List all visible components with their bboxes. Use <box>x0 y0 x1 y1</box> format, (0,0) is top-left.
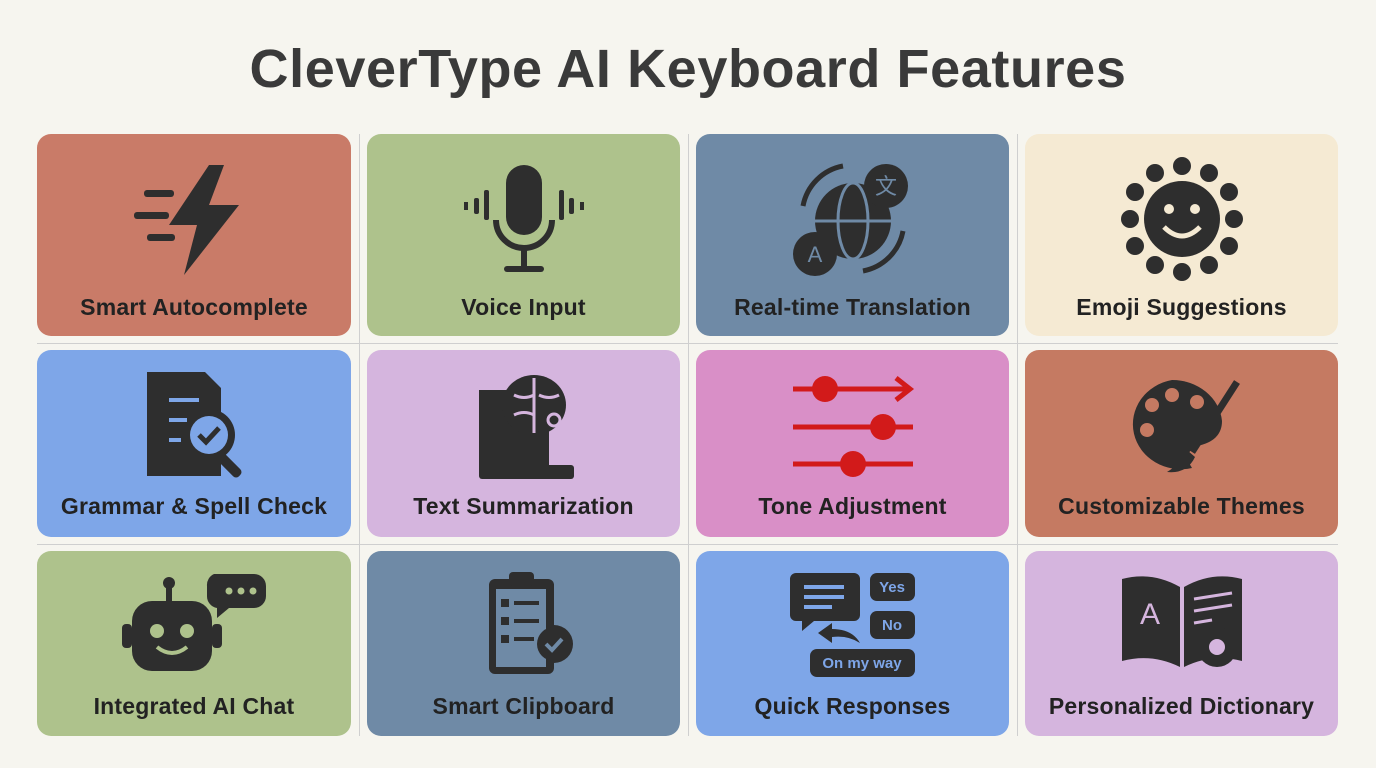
icon: clipboard <box>489 572 573 674</box>
card: Emoji Suggestions: Emoji Suggestions <box>1076 294 1287 320</box>
card: Smart Clipboard <box>367 551 680 736</box>
icon: quick replies: On my way <box>822 655 902 672</box>
card: Text Summarization <box>367 350 680 537</box>
icon: document magnifier <box>147 372 242 478</box>
card: Tone Adjustment <box>696 350 1009 537</box>
card: Real-time Translation: Real-time Translation <box>734 294 971 320</box>
card: Personalized Dictionary <box>1025 551 1338 736</box>
card: Emoji Suggestions <box>1025 134 1338 336</box>
icon: open book gear <box>1122 576 1242 667</box>
card: Smart Clipboard: Smart Clipboard <box>433 693 614 719</box>
icon: quick replies: Yes <box>879 579 904 596</box>
card: Smart Autocomplete: Smart Autocomplete <box>80 294 308 320</box>
icon: book brain <box>479 375 574 479</box>
icon: lightning <box>134 165 239 275</box>
icon: open book gear: A <box>1139 598 1160 631</box>
card: Customizable Themes <box>1025 350 1338 537</box>
card: Quick Responses <box>696 551 1009 736</box>
icon: quick replies <box>790 573 915 677</box>
card: Grammar & Spell Check: Grammar & Spell Check <box>61 493 327 519</box>
icon: globe translation: A <box>807 242 822 267</box>
card: Smart Autocomplete <box>37 134 351 336</box>
card: Real-time Translation <box>696 134 1009 336</box>
card: Customizable Themes: Customizable Themes <box>1058 493 1305 519</box>
card: Quick Responses: Quick Responses <box>754 693 951 719</box>
card: Integrated AI Chat: Integrated AI Chat <box>94 693 294 719</box>
icon: palette <box>1132 380 1240 472</box>
icon: robot chat <box>122 574 266 671</box>
card: Personalized Dictionary: Personalized Dictionary <box>1049 693 1314 719</box>
icon: globe translation: 文 <box>874 169 897 201</box>
card: Voice Input: Voice Input <box>461 294 586 320</box>
card: Grammar & Spell Check <box>37 350 351 537</box>
card: Voice Input <box>367 134 680 336</box>
title: CleverType AI Keyboard Features <box>250 39 1126 99</box>
icon: globe translation <box>793 164 908 276</box>
card: Text Summarization: Text Summarization <box>413 493 634 519</box>
icon: sliders <box>793 376 914 477</box>
card: Tone Adjustment: Tone Adjustment <box>758 493 947 519</box>
card: Integrated AI Chat <box>37 551 351 736</box>
icon: quick replies: No <box>882 617 902 634</box>
icon: emoji ring <box>1121 157 1243 281</box>
icon: microphone <box>464 165 584 272</box>
